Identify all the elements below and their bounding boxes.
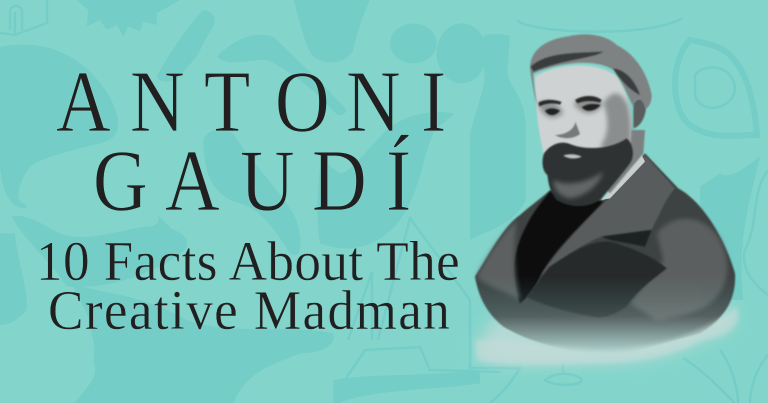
portrait: jacket group — [475, 153, 735, 354]
portrait: lip — [563, 154, 582, 159]
doodle: left bar — [0, 233, 27, 325]
doodle: right squiggle — [744, 170, 768, 295]
doodle: glass — [545, 362, 582, 385]
portrait: dark shirt front — [514, 192, 603, 303]
portrait of Gaudí — [475, 34, 739, 365]
portrait: faded base glow — [477, 303, 734, 365]
doodle: boat hull — [333, 370, 480, 403]
doodle: ornament inside vase — [695, 67, 735, 108]
portrait: dark pocket fold — [527, 242, 667, 318]
portrait: jacket — [475, 153, 735, 354]
doodle: big animal — [0, 45, 118, 209]
portrait: face side shadow — [600, 93, 631, 150]
doodle: sun — [77, 0, 180, 37]
portrait: lapel dark notch — [602, 230, 652, 247]
doodle: olive right — [437, 23, 487, 83]
portrait: hair — [530, 34, 652, 108]
portrait: hair shadow — [531, 52, 640, 95]
doodle: bowl — [470, 368, 520, 403]
doodle: flower leaves — [683, 350, 768, 403]
doodle: fish — [12, 213, 187, 287]
doodle: central leaf — [157, 10, 215, 82]
portrait: sleeve highlight — [630, 219, 727, 320]
portrait: eyes — [545, 104, 601, 115]
doodle: sailboat — [345, 218, 500, 380]
title: Antoni: ANTONI — [56, 53, 446, 150]
portrait: beard highlight — [553, 172, 603, 198]
portrait: left sleeve mid tone — [477, 220, 520, 300]
portrait: eyebrows — [538, 96, 602, 107]
doodle: right arc — [317, 112, 453, 248]
doodle: bottle — [470, 34, 526, 240]
doodle: top dish — [517, 18, 682, 32]
doodle: bull head — [293, 0, 370, 62]
title: Gaudí: GAUDÍ — [93, 132, 411, 229]
subtitle line 2: Creative Madman — [48, 279, 450, 341]
portrait: face — [535, 65, 631, 164]
portrait: nose shadow — [555, 122, 580, 138]
portrait: collar — [602, 155, 645, 200]
portrait: ear — [633, 99, 646, 128]
doodle: bottom blob — [72, 283, 334, 403]
portrait: lapel — [540, 155, 675, 277]
doodle: olive left — [390, 23, 437, 63]
doodle: castle outline — [0, 0, 47, 35]
subtitle line 1: 10 Facts About The — [36, 230, 460, 292]
portrait: lower haze — [475, 307, 739, 365]
portrait: eye sockets — [538, 98, 603, 118]
doodle: tall arc — [203, 130, 300, 255]
portrait: neck — [603, 130, 645, 193]
portrait: beard — [543, 138, 633, 206]
doodle: vase body — [700, 157, 760, 300]
doodle: ornate vase — [675, 40, 757, 136]
doodle: central band — [217, 35, 347, 116]
